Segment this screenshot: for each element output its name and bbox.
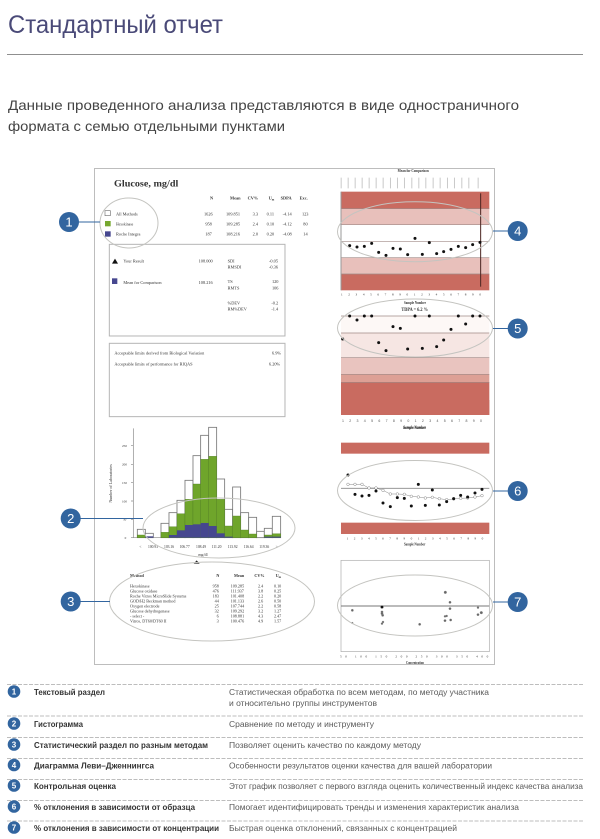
- sample deviation points: [346, 473, 483, 508]
- method statistics table: Method: [130, 573, 145, 578]
- histogram labels: [108, 444, 278, 557]
- histogram labels: 116.64: [244, 545, 254, 549]
- method statistics table: 2.47: [274, 613, 281, 618]
- histogram labels: 50: [123, 518, 127, 522]
- method statistics table: GOD/H2 Beckman method: [130, 598, 176, 603]
- legend row 5: 5: [12, 782, 17, 790]
- histogram axes: [131, 428, 281, 538]
- method statistics table: Oxygen electrode: [130, 603, 160, 608]
- method statistics table: CV%: [254, 573, 264, 578]
- panel: text section: [105, 179, 308, 417]
- methods table: 109.285: [226, 222, 240, 227]
- sample label: Sample Number: [403, 425, 426, 429]
- acceptable limits box: [109, 343, 285, 417]
- concentration axis label: Concentration: [406, 661, 424, 665]
- your result box: Your Result: [123, 259, 145, 264]
- histogram labels: 0: [125, 536, 127, 540]
- method statistics table: 958: [213, 583, 219, 588]
- legend row 2: [8, 717, 375, 730]
- method statistics table: 3.8: [258, 588, 263, 593]
- legend row 4: [8, 759, 492, 771]
- methods table: Hexokinase: [116, 223, 134, 227]
- concentration chart points: [351, 591, 483, 625]
- report frame: [94, 168, 494, 664]
- your result box: 108.216: [199, 280, 214, 285]
- legend row 7: [8, 821, 457, 834]
- callout marker 5: 5: [514, 321, 521, 336]
- your result box: 120: [272, 279, 278, 284]
- legend row 4: 4: [12, 761, 17, 770]
- chart 5 tail axis: 1 2 3 4 5 6 7 8 9 0 1 2 3 4 5 6 7 8 9 0: [342, 419, 482, 423]
- methods table: 0.20: [267, 232, 274, 237]
- methods table: All Methods: [116, 211, 138, 216]
- method statistics table: 100.476: [231, 619, 244, 624]
- histogram labels: mg/dl: [198, 552, 209, 557]
- methods table: 1626: [204, 211, 213, 216]
- your result box: 106: [272, 285, 279, 290]
- callout marker 2: [61, 508, 81, 528]
- sample deviation axis: 1 2 3 4 5 6 7 8 9 0 1 2 3 4 5 6 7 8 9 0: [347, 536, 484, 540]
- callout marker 6: [508, 481, 528, 501]
- legend row 6: [8, 800, 519, 813]
- methods table: -4.14: [283, 211, 292, 216]
- legend row 5: Контрольная оценка: [34, 781, 116, 791]
- legend row 7: Быстрая оценка отклонений, связанных с концентрацией: [229, 823, 457, 833]
- methods table: Mean: [230, 196, 241, 201]
- your result box: Mean for Comparison: [123, 280, 162, 285]
- Levey-Jennings date labels: [341, 178, 479, 188]
- histogram labels: 100.93: [148, 545, 158, 549]
- panel: Levey-Jennings and score charts: [341, 169, 489, 415]
- method statistics table: 0.20: [274, 593, 281, 598]
- legend row 5: [8, 779, 583, 792]
- methods table: 0.10: [267, 222, 274, 227]
- report heading: Glucose, mg/dl: [114, 179, 179, 190]
- histogram instrument bars: [145, 523, 281, 538]
- callout marker 3: [61, 592, 81, 612]
- concentration axis ticks: 50 100 150 200 250 300 350 400: [340, 654, 489, 658]
- histogram labels: 119.36: [259, 545, 269, 549]
- methods table: 2.4: [253, 222, 259, 227]
- your result box: -0.05: [269, 259, 278, 264]
- legend row 3: 3: [12, 740, 17, 750]
- methods table: m: [272, 198, 275, 202]
- callout marker 1: [59, 212, 79, 232]
- method statistics table: Hexokinase: [130, 583, 150, 588]
- methods table: 0.11: [267, 211, 274, 216]
- method statistics table: 44: [215, 598, 220, 603]
- histogram labels: 100: [122, 499, 127, 503]
- acceptable limits box: Acceptable limits of performance for RIQAS: [114, 361, 193, 366]
- methods table: Roche Integra: [116, 232, 140, 237]
- histogram labels: >: [276, 545, 278, 549]
- intro text: Данные проведенного анализа представляются в виде одностраничного: [8, 97, 519, 113]
- method statistics table: 2.2: [258, 603, 263, 608]
- your result box: RMSDI: [228, 265, 242, 270]
- chart title: Mean for Comparison: [398, 169, 429, 173]
- method statistics table: Roche Vitros MicroSlide Systems: [130, 593, 187, 598]
- methods table: -4.12: [283, 222, 292, 227]
- method statistics table: 101.408: [231, 593, 244, 598]
- method statistics table: 0.25: [274, 588, 281, 593]
- method statistics table: Mean: [234, 573, 245, 578]
- callout marker 7: [508, 592, 528, 612]
- sample deviation axis label: Sample Number: [404, 542, 426, 546]
- your result box: -0.36: [269, 265, 279, 270]
- callout connectors: [70, 222, 518, 602]
- legend row 4: Особенности результатов оценки качества для вашей лаборатории: [229, 760, 492, 770]
- methods table: SDPA: [281, 196, 293, 201]
- acceptable limits box: 6.9%: [272, 350, 281, 355]
- methods table: N: [210, 196, 214, 201]
- callout marker 4: 4: [514, 224, 521, 238]
- histogram labels: <: [139, 545, 141, 549]
- legend row 6: % отклонения в зависимости от образца: [34, 802, 195, 812]
- method statistics table: 4.3: [258, 613, 263, 618]
- Levey-Jennings points: [348, 237, 481, 257]
- your result box: RMTS: [228, 285, 240, 290]
- method statistics table: Glucose oxidase: [130, 588, 158, 593]
- legend row 3: Позволяет оценить качество по каждому методу: [229, 740, 422, 750]
- histogram labels: Number of Laboratories: [108, 464, 113, 503]
- legend row 5: Этот график позволяет с первого взгляда оценить количественный индекс качества анализа: [229, 781, 583, 791]
- histogram labels: 113.92: [228, 545, 238, 549]
- panel: deviation charts: [340, 425, 489, 665]
- methods table: Exc.: [300, 196, 308, 201]
- chart 5 tail axis: Sample Number: [403, 426, 426, 430]
- your result box: -0.2: [271, 300, 278, 305]
- callout marker 5: [508, 318, 528, 338]
- legend row 4: Диаграмма Леви–Дженнингса: [34, 760, 154, 770]
- method statistics table: 476: [213, 588, 219, 593]
- method statistics table: 109.292: [231, 608, 244, 613]
- histogram labels: 106.77: [180, 545, 190, 549]
- callout marker 4: [508, 221, 528, 241]
- method statistics table: Glucose dehydrogenase: [130, 608, 170, 613]
- legend row 1: 1: [12, 688, 17, 696]
- your result box: %DEV: [228, 300, 241, 305]
- method statistics table: 4.9: [258, 619, 263, 624]
- method statistics table: 0.50: [274, 598, 281, 603]
- legend row 3: Статистический раздел по разным методам: [34, 740, 208, 750]
- methods table: 3.3: [253, 211, 258, 216]
- Levey-Jennings axis ticks: 1 2 3 4 5 6 7 8 9 0 1 2 3 4 5 6 7 8 9 0: [341, 293, 481, 297]
- legend row 6: Помогает идентифицировать тренды и изменения характеристик анализа: [229, 802, 519, 812]
- legend row 3: [8, 738, 422, 751]
- method statistics table: 25: [215, 603, 219, 608]
- methods table: -4.08: [283, 232, 292, 237]
- methods table: CV%: [248, 196, 258, 201]
- intro text: [8, 97, 519, 134]
- histogram labels: 111.20: [212, 545, 222, 549]
- method statistics table: 3: [217, 619, 219, 624]
- method statistics table: 2.2: [258, 593, 263, 598]
- histogram labels: 108.49: [196, 545, 206, 549]
- method statistics table: m: [279, 575, 282, 579]
- method statistics table: 111.937: [231, 588, 244, 593]
- Levey-Jennings chart bands: [341, 192, 489, 290]
- histogram method bars: [137, 456, 281, 538]
- method statistics table: 3.2: [258, 608, 263, 613]
- histogram total bars: [137, 427, 281, 538]
- title: Стандартный отчет: [8, 11, 224, 39]
- legend row 2: Сравнение по методу и инструменту: [229, 719, 375, 729]
- method statistics table: 107.744: [231, 603, 245, 608]
- method statistics table: 183: [213, 593, 219, 598]
- legend row 7: 7: [12, 824, 17, 832]
- method statistics table: 1.57: [274, 619, 281, 624]
- histogram labels: 150: [122, 481, 127, 485]
- methods table: 109.851: [226, 211, 240, 216]
- methods table: 80: [303, 222, 308, 227]
- your result box: [109, 244, 285, 336]
- your result box: RM%DEV: [228, 307, 248, 312]
- callout marker 2: 2: [67, 511, 74, 526]
- panel: histogram and method statistics: [108, 427, 282, 625]
- methods table: U: [269, 196, 272, 201]
- histogram labels: 200: [122, 463, 127, 467]
- legend row 1: Текстовый раздел: [34, 687, 105, 697]
- method statistics table: [130, 573, 282, 625]
- methods table: 958: [205, 222, 212, 227]
- legend row 1: и относительно группы инструментов: [229, 698, 377, 708]
- legend row 2: Гистограмма: [34, 719, 83, 729]
- method statistics table: 2.4: [258, 583, 264, 588]
- histogram labels: 103.16: [164, 545, 174, 549]
- concentration chart plot: [341, 560, 489, 652]
- methods table: 108.216: [226, 232, 241, 237]
- method statistics table: N: [216, 573, 219, 578]
- callout marker 3: 3: [67, 594, 74, 609]
- method statistics table: 108.881: [231, 613, 244, 618]
- methods table: 2.0: [253, 232, 258, 237]
- method statistics table: U: [276, 573, 279, 578]
- sample deviation chart bands: [341, 443, 489, 534]
- legend swatches: [105, 211, 111, 237]
- acceptable limits box: Acceptable limits derived from Biological Variation: [114, 350, 205, 355]
- callout marker 1: 1: [65, 214, 73, 230]
- your result box: TS: [228, 279, 233, 284]
- legend row 1: Статистическая обработка по всем методам, по методу участника: [229, 687, 489, 697]
- score heading: TDPA = 6.2 %: [401, 308, 428, 313]
- legend row 1: [8, 685, 489, 708]
- score chart points: [341, 314, 481, 352]
- method statistics table: 0.10: [274, 583, 281, 588]
- method statistics table: - select -: [130, 613, 145, 618]
- methods table: 187: [205, 232, 213, 237]
- your result box: SDI: [228, 259, 235, 264]
- method statistics table: 32: [215, 608, 219, 613]
- method statistics table: 109.285: [231, 583, 244, 588]
- methods table: [116, 196, 308, 237]
- method statistics table: 101.133: [231, 598, 244, 603]
- method statistics table: 2.6: [258, 598, 263, 603]
- method statistics table: 1.27: [274, 608, 281, 613]
- score chart bands: [341, 316, 489, 415]
- methods table: 123: [302, 211, 308, 216]
- legend row 6: 6: [12, 802, 17, 812]
- legend row 2: 2: [12, 720, 17, 728]
- method statistics table: 6: [217, 613, 219, 618]
- callout marker 6: 6: [514, 484, 521, 498]
- acceptable limits box: 6.20%: [269, 361, 281, 366]
- methods table: 14: [303, 232, 308, 237]
- chart 5 tail axis: [341, 400, 489, 430]
- method statistics table: Vitros, DT60/DT60 II: [130, 619, 167, 625]
- sample deviation trend line: [347, 483, 483, 501]
- histogram labels: 250: [122, 444, 127, 448]
- your result box: 108.000: [199, 259, 213, 264]
- your result box: -1.4: [271, 307, 279, 312]
- callout ellipses: [100, 198, 492, 641]
- intro text: формата с семью отдельными пунктами: [8, 118, 285, 134]
- legend row 7: % отклонения в зависимости от концентрации: [34, 823, 219, 833]
- result marker: [194, 560, 200, 564]
- x axis label: Sample Number: [404, 301, 426, 305]
- method statistics table: 0.58: [274, 603, 281, 608]
- callout marker 7: 7: [514, 594, 521, 610]
